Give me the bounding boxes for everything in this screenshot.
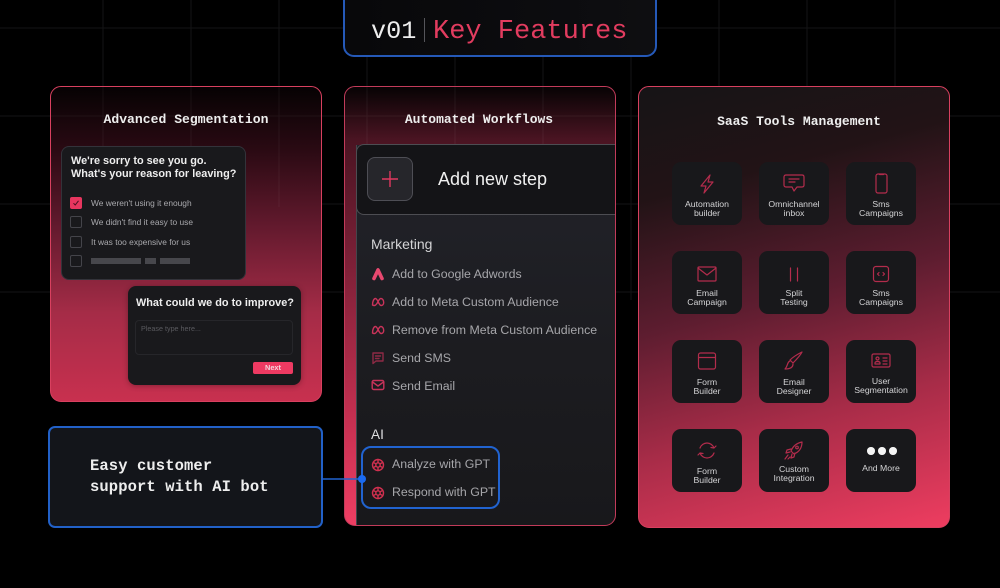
survey question: We're sorry to see you go. <box>71 155 207 167</box>
tile: sms campaigns: Campaigns <box>859 208 903 218</box>
tile: form builder sync: Builder <box>693 475 721 485</box>
tile: custom integration <box>759 429 829 492</box>
tile: and more: And More <box>862 463 900 473</box>
heading: automated workflows: Automated Workflows <box>405 112 553 127</box>
panel: saas tools management <box>638 86 950 528</box>
callout text <box>90 457 269 496</box>
tile: omnichannel inbox <box>759 162 829 225</box>
tile: email designer: Email <box>783 377 805 387</box>
icon: sms <box>372 352 384 364</box>
connector arrow <box>323 475 366 483</box>
item: remove from meta: Remove from Meta Custom Audience <box>392 323 597 337</box>
add step label: Add new step <box>438 169 547 189</box>
tile: automation builder <box>672 162 742 225</box>
heading: saas tools: SaaS Tools Management <box>717 114 881 129</box>
tile: email campaign: Email <box>696 288 718 298</box>
item: send email: Send Email <box>392 379 455 393</box>
callout: AI bot support <box>48 426 323 528</box>
tile: split testing: Testing <box>780 297 808 307</box>
next button: Next <box>265 363 281 372</box>
icon: gpt analyze <box>372 458 384 472</box>
tile: omnichannel inbox: Omnichannel <box>768 198 820 208</box>
item: analyze with gpt: Analyze with GPT <box>392 457 490 471</box>
icon: meta remove <box>372 326 384 334</box>
tile: custom integration: Integration <box>773 473 815 483</box>
item: google adwords: Add to Google Adwords <box>392 267 522 281</box>
callout text: Easy customer <box>90 457 212 475</box>
item: send sms: Send SMS <box>392 351 451 365</box>
tile: split testing: Split <box>786 288 802 298</box>
plus button <box>367 157 413 201</box>
title <box>343 0 657 57</box>
tile: user segmentation: Segmentation <box>854 385 908 395</box>
heading: advanced segmentation: Advanced Segmentation <box>103 112 268 127</box>
tile: sms campaigns: Sms <box>872 198 890 208</box>
icon: meta <box>372 298 384 306</box>
AI heading: AI <box>371 427 384 442</box>
tile: user segmentation: User <box>872 376 890 386</box>
marketing heading: Marketing <box>371 236 432 252</box>
tile: automation builder: builder <box>694 208 720 218</box>
tile: omnichannel inbox: inbox <box>784 208 804 218</box>
option 3: It was too expensive for us <box>91 237 190 247</box>
tile: and more <box>846 429 916 492</box>
tile: sms campaigns code: Campaigns <box>859 297 903 307</box>
survey card <box>61 146 246 280</box>
tile: email designer: Designer <box>777 386 811 396</box>
tile: form builder: Form <box>697 377 717 387</box>
tile: form builder sync <box>672 429 742 492</box>
icon: gpt respond <box>372 486 384 500</box>
icon: email <box>372 380 384 390</box>
checkbox 3 <box>70 236 82 248</box>
version label: v01 <box>371 17 416 46</box>
tile: sms campaigns code: Sms <box>872 288 890 298</box>
tile: user segmentation <box>846 340 916 403</box>
tile: email designer <box>759 340 829 403</box>
input placeholder: Please type here... <box>141 324 201 333</box>
highlight: GPT actions <box>361 446 500 509</box>
placeholder option <box>91 258 190 264</box>
improvement card <box>128 286 301 385</box>
next button <box>253 362 293 374</box>
workflow list background <box>356 145 617 527</box>
tile: form builder <box>672 340 742 403</box>
improvement question: What could we do to improve? <box>136 297 294 309</box>
tile: sms campaigns code <box>846 251 916 314</box>
checked checkbox <box>70 197 82 209</box>
survey question: What's your reason for leaving? <box>71 168 236 180</box>
tile: split testing <box>759 251 829 314</box>
tile: form builder: Builder <box>693 386 721 396</box>
add new step bar <box>356 144 615 215</box>
tile: automation builder: Automation <box>685 198 729 208</box>
three dots <box>867 447 897 455</box>
checkbox 4 <box>70 255 82 267</box>
item: respond with gpt: Respond with GPT <box>392 485 496 499</box>
text input <box>135 320 293 355</box>
option 2: We didn't find it easy to use <box>91 217 193 227</box>
tile: email campaign <box>672 251 742 314</box>
title text: Key Features <box>433 17 627 47</box>
panel: automated workflows <box>344 86 616 526</box>
panel: advanced segmentation <box>50 86 322 402</box>
tile: sms campaigns <box>846 162 916 225</box>
item: add to meta: Add to Meta Custom Audience <box>392 295 559 309</box>
checkbox 2 <box>70 216 82 228</box>
title separator <box>424 18 425 42</box>
icon: google ads <box>372 268 384 280</box>
tile: email campaign: Campaign <box>687 297 727 307</box>
survey question <box>71 155 236 180</box>
tile: custom integration: Custom <box>779 464 809 474</box>
callout text: support with AI bot <box>90 478 269 496</box>
tile: form builder sync: Form <box>697 466 717 476</box>
option 1: We weren't using it enough <box>91 198 192 208</box>
